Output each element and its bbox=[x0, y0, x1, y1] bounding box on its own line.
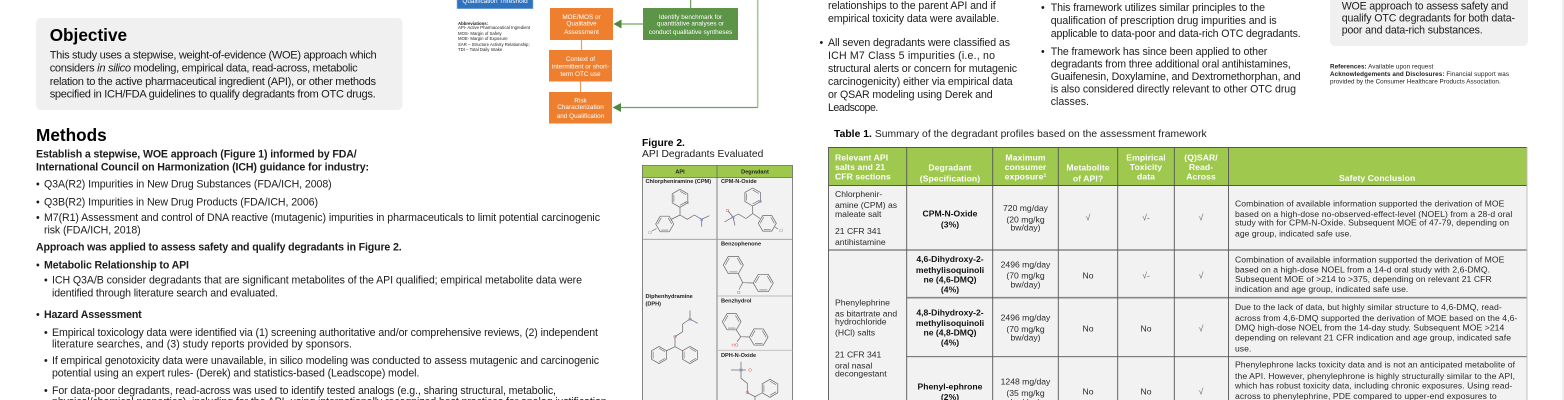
molecule: diphenhydramine: Diphenhydramine bbox=[646, 294, 693, 300]
header row: Degradant bbox=[741, 170, 769, 176]
row: 4,6-DMQ: 2496 mg/day bbox=[1001, 260, 1051, 270]
molecule: CPM-N-oxide: O bbox=[726, 208, 730, 213]
row: 4,8-DMQ: No bbox=[1140, 324, 1152, 334]
row: CPM-N-Oxide: √- bbox=[1142, 212, 1150, 222]
molecule: benzophenone bbox=[721, 242, 776, 296]
molecule: DPH-N-oxide: DPH-N-Oxide bbox=[721, 353, 756, 359]
table: figure 2 degradants bbox=[642, 165, 792, 400]
text: metabolic relationship: • bbox=[44, 275, 48, 287]
text: phenylephrine API cell bbox=[835, 298, 897, 378]
text: results bullet continuation: relationships to the parent API and if bbox=[828, 0, 996, 12]
row: CPM-N-Oxide: age group, indicated safe use. bbox=[1235, 228, 1352, 238]
text: framework bullets: • bbox=[1041, 46, 1045, 58]
header row bbox=[642, 166, 792, 178]
row: 4,6-DMQ: bw/day) bbox=[1010, 280, 1041, 290]
box: context of OTC use: term OTC use bbox=[560, 71, 601, 78]
text: stepwise approach and guidance: risk (FDA/ICH, 2018) bbox=[44, 225, 141, 237]
box: MOE/MOS or qualitative assessment: Assessment bbox=[564, 29, 599, 36]
chart: figure 1 flowchart bbox=[457, 0, 758, 124]
box: identify benchmark: quantitative analyses or bbox=[657, 20, 725, 28]
row: CPM-N-Oxide: bw/day) bbox=[1010, 222, 1041, 232]
row: CPM-N-Oxide: (3%) bbox=[941, 220, 959, 230]
text: M7 class 5 bullet: structural alerts or concern for mutagenic bbox=[828, 63, 1018, 75]
row: CPM-N-Oxide: √ bbox=[1086, 212, 1091, 222]
box: identify benchmark: Identify benchmark for bbox=[659, 14, 723, 21]
panel: conclusion callout bbox=[1330, 0, 1528, 46]
row: CPM-N-Oxide: (20 mg/kg bbox=[1006, 214, 1045, 224]
text: objective body: considers in silico modeling, empirical data, read-across, metabolic bbox=[50, 62, 358, 74]
table header row: of API? bbox=[1073, 174, 1103, 184]
arrow: benchmark to assessment bbox=[614, 20, 643, 28]
text: abbreviations bbox=[458, 21, 531, 52]
text: stepwise approach and guidance: M7(R1) Assessment and control of DNA reactive (mutagenic) impurities in pharmaceuticals to limit potential carcinogenic bbox=[44, 212, 601, 224]
text: framework bullets bbox=[1041, 2, 1301, 108]
box: qualification threshold bbox=[457, 0, 533, 9]
text: M7 class 5 bullet: ICH M7 Class 5 impurities (i.e., no bbox=[828, 50, 995, 62]
text: stepwise approach and guidance: • bbox=[36, 212, 40, 224]
table header row: exposure¹ bbox=[1005, 172, 1046, 182]
text: results bullet continuation bbox=[828, 0, 999, 25]
row: 4,6-DMQ: No bbox=[1082, 270, 1094, 280]
row: 4,6-DMQ: 4,6-Dihydroxy-2- bbox=[916, 254, 984, 264]
text: hazard assessment: • bbox=[36, 309, 40, 321]
molecule: DPH-N-oxide: O bbox=[748, 368, 752, 372]
row: 4,6-DMQ: √- bbox=[1142, 270, 1150, 280]
panel: results and conclusions column bbox=[820, 0, 1301, 114]
panel: methods bbox=[36, 125, 607, 400]
molecule: benzhydrol: HO bbox=[732, 342, 739, 348]
molecule: chlorpheniramine bbox=[646, 179, 711, 236]
panel: conclusion callout: WOE approach to assess safety and bbox=[1342, 0, 1508, 12]
text: abbreviations: Abbreviations: bbox=[458, 21, 489, 26]
text: hazard assessment: If empirical genotoxicity data were unavailable, in silico modeling was conducted to assess mutagenic and carcinogenic bbox=[52, 355, 600, 367]
text: hazard assessment: Empirical toxicology data were identified via (1) screening authoritative and/or comprehensive reviews, (2) independent bbox=[52, 327, 598, 339]
molecule: CPM-N-oxide: N bbox=[758, 199, 762, 204]
text: M7 class 5 bullet: • bbox=[820, 37, 824, 49]
row: 4,6-DMQ: √ bbox=[1199, 270, 1204, 280]
table header row: Metabolite bbox=[1066, 162, 1110, 172]
heading: objective: Objective bbox=[50, 25, 127, 45]
text: objective body: specified in ICH/FDA guidelines to qualify degradants from OTC drugs. bbox=[50, 89, 376, 101]
text: metabolic relationship: ICH Q3A/B consider degradants that are significant metabolites of the API qualified; empirical metabolite data were bbox=[52, 275, 582, 287]
heading: figure 2 bbox=[642, 138, 764, 160]
row: CPM-N-Oxide: Combination of available information supported the derivation of MOE bbox=[1235, 198, 1505, 208]
table header row: Toxicity bbox=[1130, 162, 1162, 172]
text: M7 class 5 bullet: or QSAR modeling using Derek and bbox=[828, 89, 993, 101]
table header row: (Specification) bbox=[920, 174, 980, 184]
text: stepwise approach and guidance: • bbox=[36, 196, 40, 208]
molecule: CPM-N-oxide bbox=[721, 179, 783, 235]
text: stepwise approach and guidance: • bbox=[36, 179, 40, 191]
row: 4,8-DMQ: ne (4,8-DMQ) bbox=[924, 328, 977, 338]
text: hazard assessment: For data-poor degradants, read-across was used to identify tested analogs (e.g., sharing structural, metabolic, bbox=[52, 385, 556, 397]
text: framework bullets: This framework utilizes similar principles to the bbox=[1051, 2, 1265, 14]
row: 4,8-DMQ: 2496 mg/day bbox=[1001, 312, 1051, 322]
header row: API bbox=[675, 170, 685, 176]
molecule: chlorpheniramine: N bbox=[685, 200, 689, 205]
row: phenylephrone: the API. However, phenylephrone is highly structurally similar to the API, bbox=[1235, 371, 1515, 381]
row: 4,6-DMQ: ne (4,6-DMQ) bbox=[924, 274, 977, 284]
text: abbreviations: TDI – Total Daily Intake bbox=[458, 47, 503, 52]
text: references and acknowledgements: References: Available upon request bbox=[1330, 63, 1434, 70]
row: 4,8-DMQ: √ bbox=[1199, 324, 1204, 334]
panel: conclusion callout: poor and data-rich substances. bbox=[1342, 24, 1483, 36]
heading: methods: Methods bbox=[36, 125, 107, 145]
arrow: to risk characterization bbox=[612, 103, 621, 112]
text: framework bullets: qualification of prescription drug impurities and is bbox=[1051, 15, 1277, 27]
box: identify benchmark: conduct qualitative syntheses bbox=[649, 29, 732, 36]
row: 4,6-DMQ: (4%) bbox=[941, 284, 959, 294]
row: CPM-N-Oxide: based on a high-dose no-observed-effect-level (NOEL) from a 28-d oral bbox=[1235, 209, 1512, 219]
text: M7 class 5 bullet: carcinogenicity) either via empirical data bbox=[828, 76, 1013, 88]
text: hazard assessment: • bbox=[44, 327, 48, 339]
table header row: Maximum bbox=[1005, 152, 1046, 162]
row: 4,8-DMQ: depending on relevant 21 CFR indication and age group, indicated safe bbox=[1235, 332, 1511, 342]
row: CPM-N-Oxide: maleate salt bbox=[835, 209, 882, 219]
table header row: salts and 21 bbox=[835, 162, 885, 172]
text: objective body: This study uses a stepwise, weight-of-evidence (WOE) approach which bbox=[50, 49, 377, 61]
text: stepwise approach and guidance: Approach was applied to assess safety and qualify degradants in Figure 2. bbox=[36, 242, 402, 254]
text: phenylephrine API cell: 21 CFR 341 bbox=[835, 350, 882, 360]
table header row: CFR sections bbox=[835, 172, 891, 182]
row: 4,8-DMQ: 4,8-Dihydroxy-2- bbox=[916, 308, 984, 318]
text: metabolic relationship: Metabolic Relationship to API bbox=[44, 260, 189, 272]
row: 4,6-DMQ: methylisoquinoli bbox=[916, 265, 984, 275]
molecule: DPH-N-oxide: O bbox=[746, 390, 750, 395]
molecule: chlorpheniramine: Cl bbox=[648, 230, 652, 235]
text: hazard assessment: • bbox=[44, 385, 48, 397]
row: phenylephrone bbox=[918, 360, 1516, 400]
text: stepwise approach and guidance: International Council on Harmonization (ICH) guidance for industry: bbox=[36, 162, 369, 174]
text: references and acknowledgements: Acknowledgements and Disclosures: Financial support was bbox=[1330, 71, 1509, 78]
text: framework bullets: Guaifenesin, Doxylamine, and Dextromethorphan, and bbox=[1051, 71, 1301, 83]
text: references and acknowledgements bbox=[1330, 63, 1509, 85]
row: phenylephrone: Phenyl-ephrone bbox=[918, 382, 983, 392]
row: phenylephrone: Phenylephrone lacks toxicity data and is not an anticipated metabolite of bbox=[1235, 360, 1516, 370]
molecule: CPM-N-oxide: N bbox=[731, 215, 735, 220]
row: 4,8-DMQ: methylisoquinoli bbox=[916, 318, 984, 328]
row: 4,8-DMQ: use. bbox=[1235, 344, 1251, 354]
row: CPM-N-Oxide: CPM-N-Oxide bbox=[923, 208, 978, 218]
table header row: Empirical bbox=[1126, 152, 1166, 162]
row: phenylephrone: No bbox=[1082, 386, 1094, 396]
row: 4,8-DMQ: (70 mg/kg bbox=[1006, 324, 1045, 334]
heading: table 1: Table 1. Summary of the degradant profiles based on the assessment framework bbox=[834, 129, 1208, 140]
molecule: benzophenone: Benzophenone bbox=[721, 242, 761, 248]
row: 4,8-DMQ: across from 4,6-DMQ supported the derivation of MOE based on the 4,6- bbox=[1235, 313, 1517, 323]
row: phenylephrone: 1248 mg/day bbox=[1001, 376, 1051, 386]
text: phenylephrine API cell: Phenylephrine bbox=[835, 298, 890, 308]
box: MOE/MOS or qualitative assessment: MOE/MOS or bbox=[562, 14, 602, 21]
text: framework bullets: classes. bbox=[1051, 96, 1089, 108]
text: phenylephrine API cell: oral nasal bbox=[835, 360, 872, 370]
text: framework bullets: is also considered directly relevant to other OTC drug bbox=[1051, 83, 1296, 95]
row: 4,6-DMQ: indication and age group, indicated safe use. bbox=[1235, 284, 1408, 294]
box: context of OTC use: intermittent or short- bbox=[552, 64, 609, 70]
row: CPM-N-Oxide: antihistamine bbox=[835, 237, 886, 247]
table header row: Across bbox=[1186, 172, 1216, 182]
row: 4,8-DMQ: (4%) bbox=[941, 338, 959, 348]
text: objective body: relation to the active pharmaceutical ingredient (API), or other methods bbox=[50, 76, 376, 88]
panel: objective bbox=[36, 18, 402, 110]
row: CPM-N-Oxide: √ bbox=[1199, 212, 1204, 222]
molecule: diphenhydramine: (DPH) bbox=[646, 302, 661, 308]
text: M7 class 5 bullet bbox=[820, 37, 1018, 114]
text: stepwise approach and guidance bbox=[36, 149, 601, 254]
row: 4,8-DMQ: No bbox=[1082, 324, 1094, 334]
row: CPM-N-Oxide: Chlorphenir- bbox=[835, 189, 882, 199]
text: metabolic relationship: identified through literature search and evaluated. bbox=[52, 288, 278, 300]
row: 4,8-DMQ: bw/day) bbox=[1010, 332, 1041, 342]
row: CPM-N-Oxide bbox=[835, 189, 1512, 247]
text: stepwise approach and guidance: Establish a stepwise, WOE approach (Figure 1) informed by FDA/ bbox=[36, 149, 357, 161]
row: phenylephrone: √ bbox=[1199, 386, 1204, 396]
row: 4,6-DMQ: based on a high-dose NOEL from a 14-d oral study with 2,6-DMQ. bbox=[1235, 264, 1490, 274]
text: stepwise approach and guidance: Q3B(R2) Impurities in New Drug Products (FDA/ICH, 2006) bbox=[44, 196, 318, 208]
molecule: benzophenone: O bbox=[737, 290, 741, 295]
molecule: CPM-N-oxide: Cl bbox=[779, 228, 783, 233]
row: CPM-N-Oxide: 21 CFR 341 bbox=[835, 226, 882, 236]
text: objective body bbox=[50, 49, 377, 101]
text: framework bullets: degradants from three additional oral antihistamines, bbox=[1051, 58, 1291, 70]
box: risk characterization: and Qualification bbox=[557, 113, 605, 120]
row: 4,8-DMQ bbox=[916, 302, 1517, 354]
table header row: Safety Conclusion bbox=[1339, 173, 1415, 183]
row: CPM-N-Oxide: amine (CPM) as bbox=[835, 200, 897, 210]
row: CPM-N-Oxide: 720 mg/day bbox=[1003, 203, 1049, 213]
molecule: DPH-N-oxide bbox=[721, 353, 778, 400]
row: 4,8-DMQ: DMQ high-dose NOEL from the 14-day study. Subsequent MOE >214 bbox=[1235, 322, 1505, 332]
table header row: Degradant bbox=[928, 162, 972, 172]
text: results bullet continuation: empirical toxicity data were available. bbox=[828, 13, 999, 25]
table header row: data bbox=[1137, 172, 1155, 182]
molecule: DPH-N-oxide: N bbox=[739, 368, 743, 372]
box: risk characterization bbox=[549, 92, 612, 124]
row: 4,6-DMQ: Combination of available information supported the derivation of MOE bbox=[1235, 254, 1505, 264]
text: abbreviations: MOE- Margin of Exposure bbox=[458, 36, 508, 41]
text: abbreviations: API- Active Pharmaceutical Ingredient bbox=[458, 25, 531, 30]
molecule: chlorpheniramine: N bbox=[700, 217, 703, 222]
box: context of OTC use bbox=[549, 50, 612, 82]
text: phenylephrine API cell: hydrochloride bbox=[835, 316, 887, 326]
text: abbreviations: SAR – Structure Activity Relationship; bbox=[458, 42, 530, 47]
molecule: diphenhydramine bbox=[646, 294, 698, 364]
text: hazard assessment bbox=[36, 309, 607, 400]
text: metabolic relationship: • bbox=[36, 260, 40, 272]
text: metabolic relationship bbox=[36, 260, 582, 300]
table header row bbox=[828, 148, 1527, 186]
connector lines bbox=[580, 0, 758, 108]
box: context of OTC use: Context of bbox=[566, 56, 595, 63]
text: abbreviations: MOS- Margin of Safety bbox=[458, 31, 503, 36]
table header row: Relevant API bbox=[835, 152, 888, 162]
row: 4,8-DMQ: Due to the lack of data, but highly similar structure to 4,6-DMQ, read- bbox=[1235, 302, 1502, 312]
text: hazard assessment: potential using an expert rules- (Derek) and statistics-based (Leadscope) model. bbox=[52, 368, 419, 380]
row: phenylephrone: which has robust toxicity data, including chronic exposures. Using read- bbox=[1234, 380, 1512, 390]
molecule: CPM-N-oxide: CPM-N-Oxide bbox=[721, 179, 757, 185]
text: framework bullets: applicable to data-poor and data-rich OTC degradants. bbox=[1051, 28, 1301, 40]
heading: figure 2: API Degradants Evaluated bbox=[642, 149, 764, 160]
text: phenylephrine API cell: (HCl) salts bbox=[835, 328, 875, 338]
text: framework bullets: • bbox=[1041, 2, 1045, 14]
text: hazard assessment: literature searches, and (3) study reports provided by sponsors. bbox=[52, 338, 352, 350]
text: framework bullets: The framework has since been applied to other bbox=[1051, 46, 1268, 58]
molecule: benzhydrol: Benzhydrol bbox=[721, 298, 752, 304]
heading: figure 2: Figure 2. bbox=[642, 138, 685, 149]
text: phenylephrine API cell: decongestant bbox=[835, 368, 887, 378]
box: risk characterization: Characterization bbox=[557, 104, 604, 111]
row: phenylephrone: No bbox=[1140, 386, 1152, 396]
box: MOE/MOS or qualitative assessment bbox=[550, 8, 613, 40]
molecule: chlorpheniramine: Chlorpheniramine (CPM) bbox=[646, 179, 711, 185]
box: risk characterization: Risk bbox=[574, 98, 588, 104]
molecule: diphenhydramine: N bbox=[688, 317, 692, 322]
table: degradant profiles bbox=[828, 147, 1527, 400]
table header row: Read- bbox=[1189, 162, 1213, 172]
row: 4,6-DMQ: Subsequent MOE of >214 to >375, depending on relevant 21 CFR bbox=[1235, 274, 1492, 284]
box: MOE/MOS or qualitative assessment: Qualitative bbox=[566, 20, 597, 28]
table header row: (Q)SAR/ bbox=[1184, 152, 1218, 162]
text: stepwise approach and guidance: Q3A(R2) Impurities in New Drug Substances (FDA/ICH, 2008) bbox=[44, 179, 332, 191]
molecule: benzhydrol bbox=[720, 298, 770, 349]
text: references and acknowledgements: provided by the Consumer Healthcare Products Association. bbox=[1330, 78, 1501, 85]
text: M7 class 5 bullet: All seven degradants were classified as bbox=[828, 37, 1010, 49]
panel: conclusion callout: qualify OTC degradants for both data- bbox=[1342, 12, 1515, 24]
table header row: consumer bbox=[1005, 162, 1047, 172]
row: 4,6-DMQ bbox=[916, 254, 1505, 294]
row: phenylephrone: (35 mg/kg bbox=[1006, 388, 1045, 398]
row: CPM-N-Oxide: study with for CPM-N-Oxide. Subsequent MOE of 47-79, depending on bbox=[1235, 218, 1509, 228]
text: M7 class 5 bullet: Leadscope. bbox=[828, 102, 878, 114]
box: identify benchmark bbox=[643, 8, 738, 40]
row: 4,6-DMQ: (70 mg/kg bbox=[1006, 270, 1045, 280]
molecule: diphenhydramine: O bbox=[673, 334, 677, 339]
text: hazard assessment: Hazard Assessment bbox=[44, 309, 142, 321]
text: phenylephrine API cell: as bitartrate and bbox=[835, 308, 897, 318]
text: hazard assessment: • bbox=[44, 355, 48, 367]
